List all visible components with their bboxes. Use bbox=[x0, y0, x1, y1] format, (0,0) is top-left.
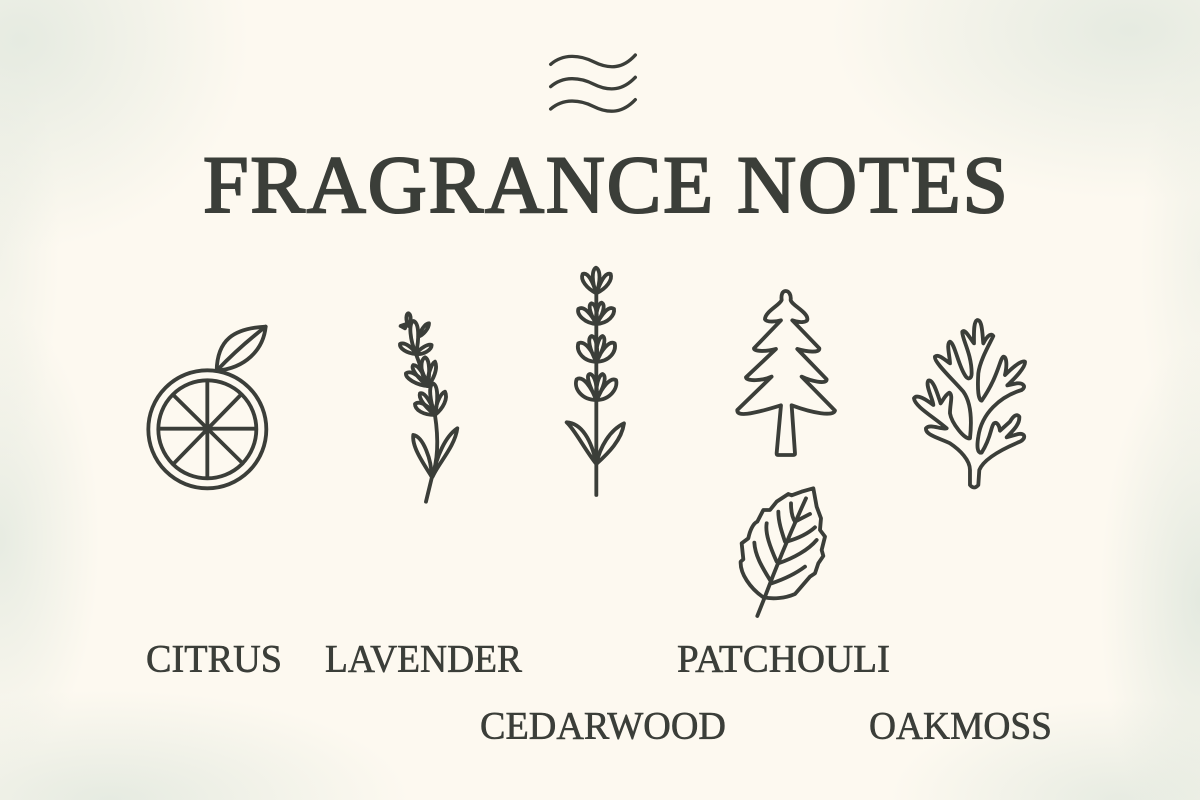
icon: patchouli leaf bbox=[741, 488, 825, 616]
icon: lavender sprig bbox=[400, 313, 457, 502]
title: FRAGRANCE NOTES bbox=[203, 139, 1008, 230]
icon: scent waves bbox=[551, 55, 635, 111]
label: oakmoss: OAKMOSS bbox=[869, 704, 1052, 748]
label: cedarwood: CEDARWOOD bbox=[480, 704, 726, 748]
label: lavender: LAVENDER bbox=[325, 638, 522, 680]
icon: cedarwood lavender stem bbox=[567, 268, 624, 495]
icon: oakmoss bbox=[914, 320, 1025, 487]
label: citrus: CITRUS bbox=[146, 638, 282, 680]
label: patchouli: PATCHOULI bbox=[677, 638, 890, 680]
icon: citrus bbox=[148, 327, 266, 488]
icon: pine tree bbox=[737, 291, 835, 455]
